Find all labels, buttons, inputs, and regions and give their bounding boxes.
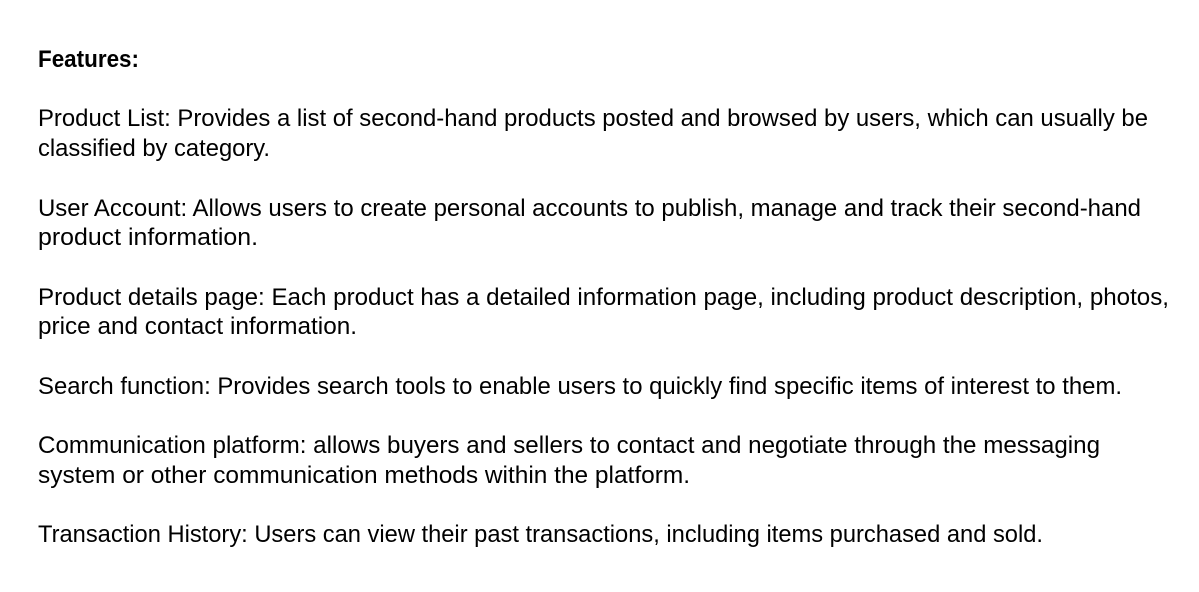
- text block: Transaction History: Transaction History: Users can view their past transactions, including items purchased and sold.: [38, 521, 1043, 548]
- text block: Product details page: [38, 284, 1169, 340]
- text block: Search function: Search function: Provides search tools to enable users to quickly find specific items of interest to them.: [38, 373, 1122, 400]
- text block: Communication platform: [38, 432, 1100, 489]
- text block: User Account: User Account: Allows users to create personal accounts to publish, manage and track their second-hand: [38, 195, 1141, 222]
- text block: Product List: Product List: Provides a list of second-hand products posted and browsed by users, which can usually be: [38, 105, 1148, 132]
- text block: Communication platform: system or other communication methods within the platform.: [38, 462, 690, 489]
- heading: Features: Features:: [38, 46, 139, 73]
- text block: Communication platform: Communication platform: allows buyers and sellers to contact and negotiate through the messaging: [38, 432, 1100, 459]
- text block: User Account: product information.: [38, 224, 258, 251]
- text block: Product details page: price and contact information.: [38, 313, 357, 340]
- text block: Product List: [38, 105, 1148, 162]
- text block: Product List: classified by category.: [38, 135, 270, 162]
- text block: User Account: [38, 195, 1141, 251]
- text block: Product details page: Product details page: Each product has a detailed information page, including product description, photos,: [38, 284, 1169, 311]
